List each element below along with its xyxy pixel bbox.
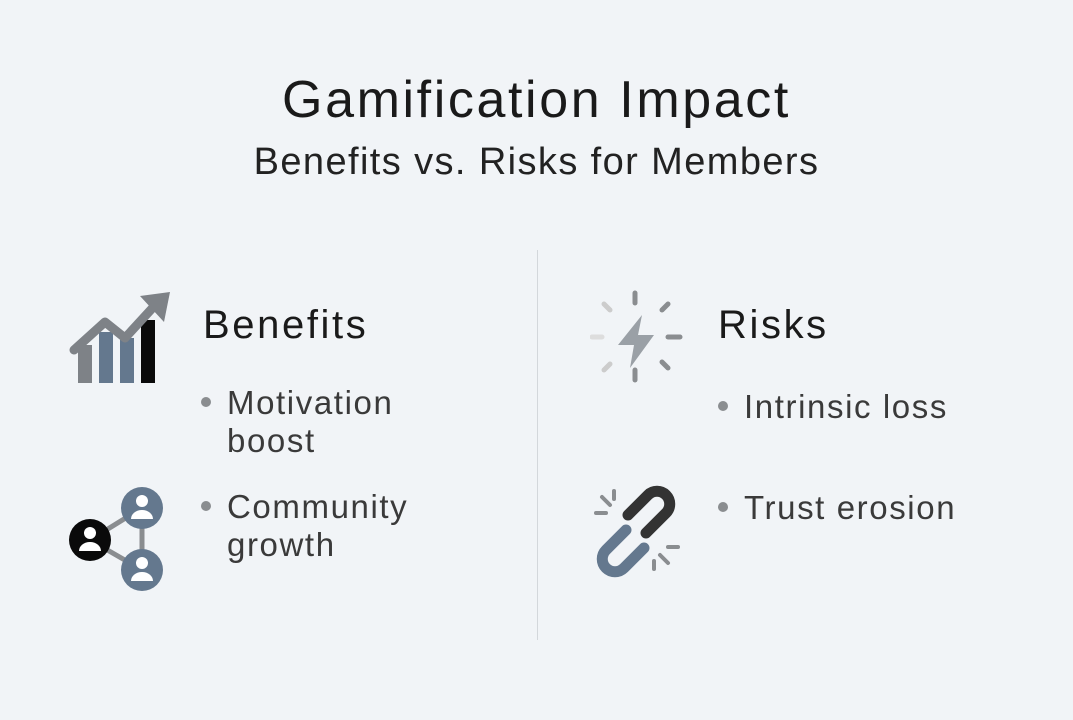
bullet: motivation boost [201, 384, 393, 459]
icon: broken link [594, 486, 680, 578]
bullet: motivation boost: boost [227, 422, 316, 459]
panel: benefits [69, 292, 408, 591]
title: Gamification Impact [282, 71, 791, 129]
bullet: trust erosion: Trust erosion [744, 489, 956, 526]
panel: risks [590, 290, 956, 578]
heading: Benefits: Benefits [203, 303, 368, 347]
icon: lightning burst [590, 290, 682, 382]
bullet: intrinsic loss: Intrinsic loss [744, 388, 948, 425]
icon: growth chart [70, 292, 170, 383]
divider [537, 250, 538, 640]
bullet: motivation boost: Motivation [227, 384, 393, 421]
bullet: community growth: Community [227, 488, 408, 525]
icon: community network [69, 487, 163, 591]
subtitle: Benefits vs. Risks for Members [254, 141, 819, 183]
bullet: community growth: growth [227, 526, 336, 563]
heading: Risks: Risks [718, 303, 829, 347]
bullet: community growth [201, 488, 408, 563]
